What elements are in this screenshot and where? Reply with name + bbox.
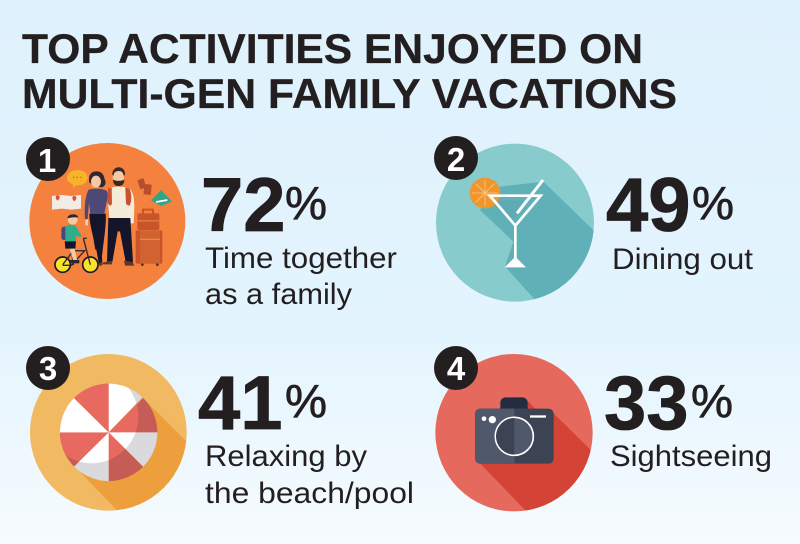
label: dining out: Dining out	[612, 243, 754, 276]
statistic 41%	[198, 361, 327, 446]
statistic 49%: 49	[606, 163, 691, 248]
icon: cocktail	[436, 144, 598, 302]
speech bubble	[67, 170, 88, 188]
statistic 72%	[201, 163, 327, 248]
woman	[89, 171, 106, 187]
icon: camera	[435, 354, 598, 512]
passports	[137, 178, 146, 189]
label: time together as a family	[205, 242, 397, 311]
tickets	[151, 190, 172, 206]
suitcases	[143, 210, 153, 214]
label: sightseeing: Sightseeing	[610, 440, 772, 473]
title: MULTI-GEN FAMILY VACATIONS	[22, 70, 677, 117]
label: time together as a family: as a family	[205, 278, 352, 311]
statistic 72%: %	[285, 177, 327, 229]
number badge 4	[434, 346, 478, 390]
icon: family with luggage	[29, 143, 185, 299]
boy	[68, 214, 78, 225]
bicycle	[55, 257, 70, 272]
label: relaxing by the beach/pool: Relaxing by	[205, 440, 367, 473]
panel: time together as a family	[26, 137, 397, 311]
title: TOP ACTIVITIES ENJOYED ON	[22, 25, 643, 72]
icon: beach ball	[30, 354, 193, 512]
statistic 33%: 33	[604, 361, 689, 446]
panel: sightseeing	[434, 346, 772, 512]
statistic 33%	[604, 361, 733, 446]
statistic 49%: %	[692, 177, 734, 229]
number badge 1	[26, 137, 70, 181]
number badge 1: 1	[38, 142, 56, 179]
statistic 49%	[606, 163, 734, 248]
title	[22, 25, 677, 117]
label: relaxing by the beach/pool: the beach/pool	[205, 477, 414, 510]
label: time together as a family: Time together	[205, 242, 397, 275]
man	[113, 170, 124, 185]
number badge 4: 4	[447, 350, 466, 387]
statistic 72%: 72	[201, 163, 286, 248]
statistic 33%: %	[691, 375, 733, 427]
number badge 3	[26, 346, 70, 390]
panel: dining out	[434, 136, 754, 302]
panel: relaxing by the beach/pool	[26, 346, 414, 512]
number badge 3: 3	[39, 350, 57, 387]
statistic 41%: 41	[198, 361, 283, 446]
label: relaxing by the beach/pool	[205, 440, 414, 510]
number badge 2: 2	[447, 141, 465, 178]
map	[52, 195, 81, 210]
number badge 2	[434, 136, 478, 180]
statistic 41%: %	[285, 375, 327, 427]
